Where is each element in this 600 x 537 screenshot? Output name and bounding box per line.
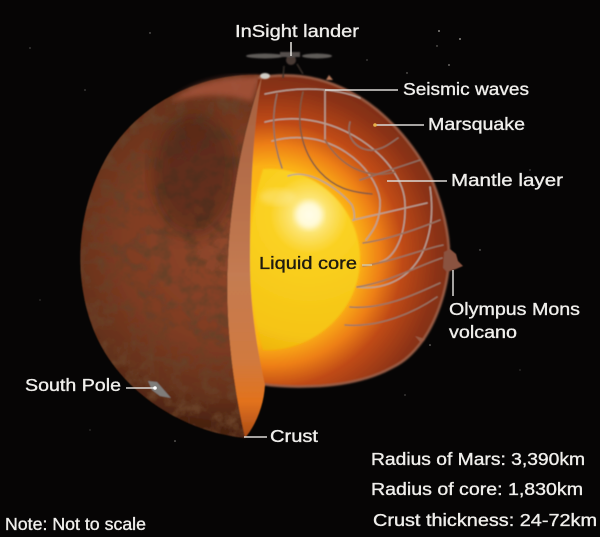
South Pole ice cap: [148, 381, 171, 398]
facts: Mars measurements: [371, 449, 597, 530]
label: South Pole: [25, 375, 157, 395]
InSight lander: [246, 52, 333, 80]
liquid core: [250, 169, 360, 350]
note: not to scale: Note: Not to scale: [5, 514, 146, 534]
label: Seismic waves: Seismic waves: [403, 79, 529, 99]
facts: Mars measurements: Radius of Mars: 3,390km: [371, 449, 585, 469]
label: Olympus Mons volcano: [449, 270, 580, 342]
label: Marsquake: [373, 114, 525, 134]
label: Liquid core: Liquid core: [259, 253, 357, 273]
label: InSight lander: [235, 21, 359, 56]
Olympus Mons volcano: [443, 249, 463, 272]
label: South Pole: South Pole: [25, 375, 121, 395]
mantle layer: [249, 75, 449, 387]
label: Olympus Mons volcano: Olympus Mons: [449, 299, 580, 319]
label: InSight lander: InSight lander: [235, 21, 359, 41]
seismic wave grid lines: [265, 89, 443, 325]
starfield: [29, 30, 531, 442]
label: Crust: [244, 426, 318, 446]
label: Mantle layer: Mantle layer: [451, 170, 563, 190]
planet surface hemisphere: [80, 73, 262, 438]
small rim bump: [415, 336, 425, 343]
crust layer: [227, 76, 265, 438]
facts: Mars measurements: Radius of core: 1,830km: [371, 479, 583, 499]
label: Olympus Mons volcano: volcano: [449, 322, 517, 342]
mantle outer rim: [258, 75, 449, 387]
label: Marsquake: Marsquake: [428, 114, 525, 134]
label: Crust: Crust: [270, 426, 318, 446]
Mars planet cutaway: [70, 70, 463, 440]
facts: Mars measurements: Crust thickness: 24-72km: [373, 510, 597, 530]
